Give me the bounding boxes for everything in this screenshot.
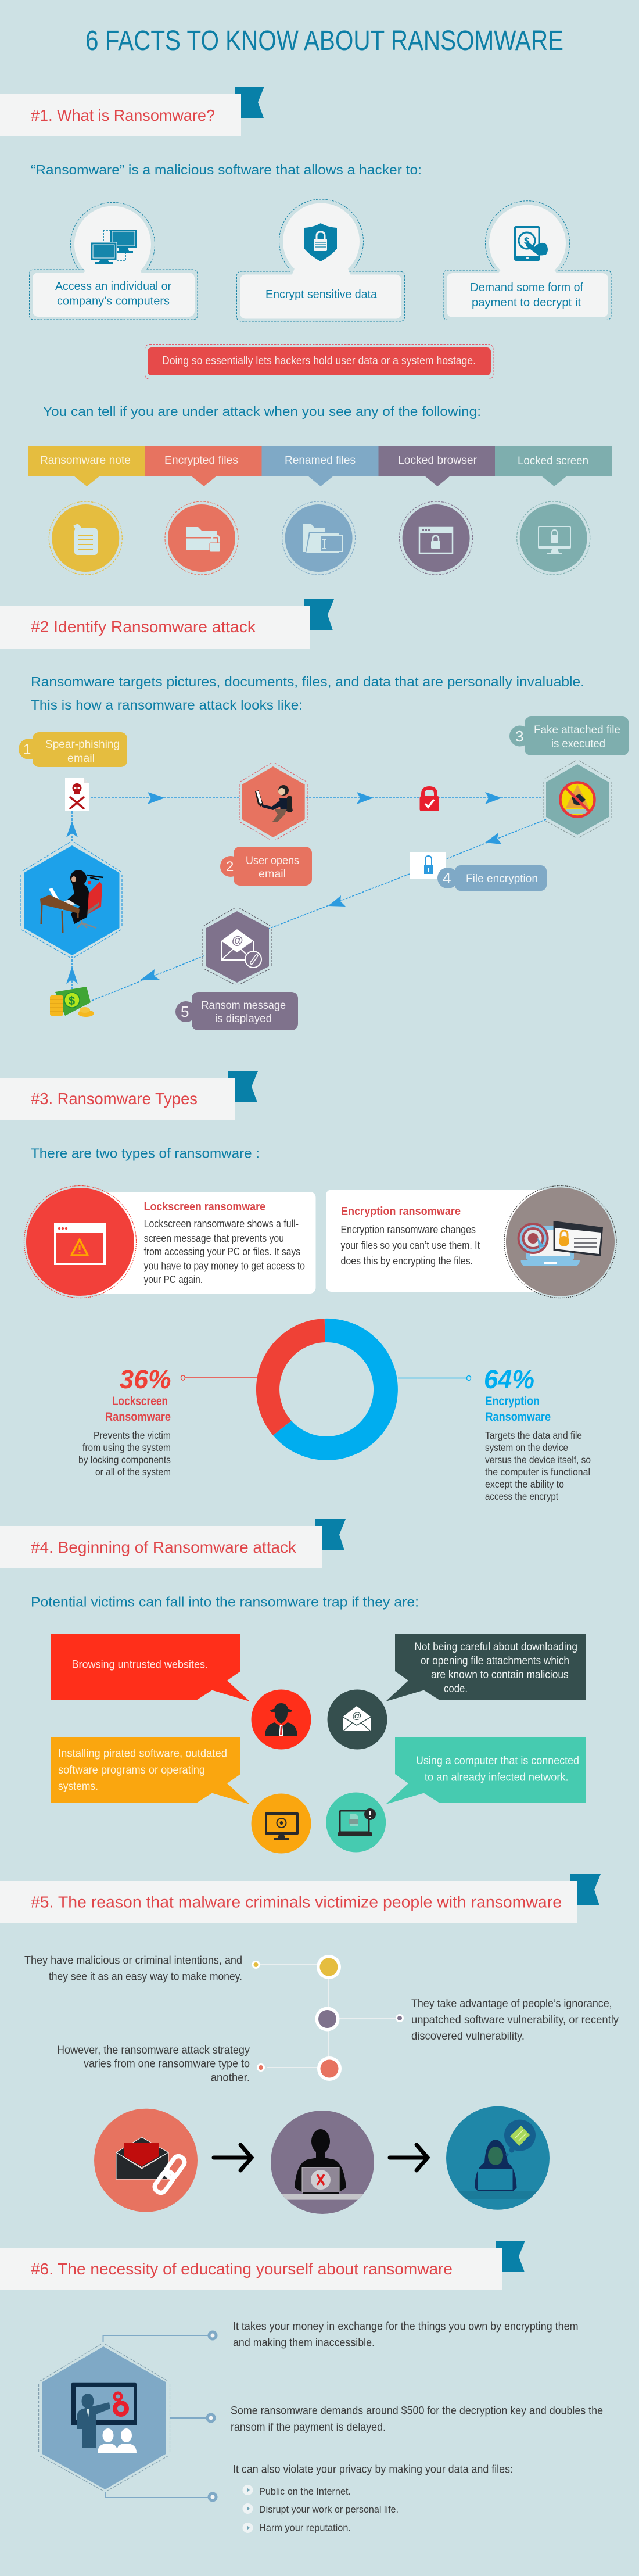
attack flow arrows	[66, 792, 546, 1001]
icon: tablet with dollar and hand	[514, 226, 548, 261]
hexagon: fake file executed	[543, 761, 612, 837]
section 3 heading banner	[0, 1071, 258, 1120]
speech bubble: careless downloads	[386, 1634, 586, 1701]
icon: infected laptop badge	[326, 1792, 386, 1853]
icon: presenter at board	[71, 2383, 137, 2453]
icon: encrypted folder badge	[165, 501, 238, 575]
stat: 64% encryption ransomware: Encryption	[486, 1395, 540, 1408]
arrow	[214, 2145, 252, 2170]
card text	[55, 280, 171, 308]
step 4 label: file encryption: File encryption	[466, 873, 538, 885]
bullet list: privacy harms	[243, 2485, 399, 2534]
intro text: what ransomware targets: Ransomware targets pictures, documents, files, and data that are personally invaluable.	[31, 674, 584, 689]
stat: 64% encryption ransomware: the computer is functional	[485, 1466, 590, 1478]
stat: 64% encryption ransomware: 64%	[484, 1364, 534, 1394]
bullet: harm reputation: Harm your reputation.	[259, 2523, 351, 2534]
step 3 label: fake attached file	[509, 716, 629, 755]
text: malicious intentions	[24, 1955, 242, 1983]
panel body text: your PC again.	[144, 1274, 203, 1285]
intro text: two types: There are two types of ransomware :	[31, 1146, 260, 1161]
icon: money and coins: $	[69, 995, 75, 1008]
hexagon: ransom message	[203, 908, 271, 985]
bullet: disrupt work: Disrupt your work or personal life.	[259, 2504, 399, 2515]
stat: 36% lockscreen ransomware: Prevents the victim	[94, 1429, 171, 1441]
icon: monitor target badge	[251, 1793, 311, 1854]
title: 6 FACTS TO KNOW ABOUT RANSOMWARE	[85, 26, 563, 56]
callout: hostage warning: Doing so essentially lets hackers hold user data or a system hostage.	[162, 354, 476, 367]
speech bubble: untrusted websites	[51, 1634, 250, 1701]
speech bubble: careless downloads: or opening file attachments which	[421, 1655, 569, 1667]
connector dot: top	[208, 2330, 217, 2341]
step 2 label: user opens email	[220, 847, 312, 886]
stat: 36% lockscreen ransomware: Lockscreen	[112, 1395, 168, 1408]
icon: envelope badge	[328, 1690, 387, 1749]
timeline node: purple	[315, 2007, 404, 2032]
text: privacy violation: It can also violate your privacy by making your data and files:	[233, 2464, 513, 2475]
step 3 label: fake attached file: is executed	[551, 738, 605, 750]
tab: encrypted files	[145, 446, 261, 486]
text: malicious intentions: they see it as an easy way to make money.	[49, 1971, 242, 1983]
panel body text: your files so you can’t use them. It	[340, 1239, 480, 1251]
text: takes your money	[233, 2321, 579, 2349]
panel heading: Lockscreen ransomware	[144, 1201, 265, 1213]
text: people's ignorance: They take advantage of people’s ignorance,	[411, 1998, 612, 2010]
icon: prohibited file	[560, 782, 595, 817]
icon: person at computer	[255, 785, 293, 822]
text: $500 demand: Some ransomware demands around $500 for the decryption key and doubles the	[231, 2405, 603, 2417]
hexagon: presenter illustration with connectors	[39, 2335, 208, 2498]
stat: 64% encryption ransomware	[398, 1364, 591, 1502]
tab: renamed files: Renamed files	[285, 454, 356, 467]
icon: renamed folder badge	[282, 501, 356, 575]
text: takes your money: It takes your money in exchange for the things you own by encrypting them	[233, 2321, 579, 2333]
text: people's ignorance: unpatched software vulnerability, or recently	[411, 2014, 619, 2026]
hexagon: user opens email	[239, 763, 307, 840]
card: encrypt data	[237, 199, 405, 321]
icon: tablet with dollar and hand: $	[524, 235, 530, 246]
text: malicious intentions: They have malicious or criminal intentions, and	[24, 1955, 242, 1967]
card text: company’s computers	[57, 295, 170, 308]
icon: victim with locked laptop badge	[271, 2111, 374, 2214]
speech bubble: infected network: to an already infected network.	[425, 1771, 569, 1784]
step 5 label: ransom message displayed	[175, 992, 298, 1030]
step 1 label: spear-phishing email: Spear-phishing	[45, 739, 120, 751]
card text: Encrypt sensitive data	[265, 288, 378, 301]
stat: 36% lockscreen ransomware	[78, 1364, 257, 1478]
hexagon: hacker	[20, 842, 122, 958]
panel body text: does this by encrypting the files.	[340, 1255, 473, 1267]
icon: laptop with target and lock window	[518, 1221, 603, 1266]
section 1 heading banner	[0, 87, 264, 136]
step 2 label: user opens email: User opens	[246, 855, 299, 867]
section 3 heading banner: #3. Ransomware Types	[31, 1090, 198, 1108]
tab: locked browser	[379, 446, 495, 486]
speech bubble: untrusted websites: Browsing untrusted websites.	[72, 1659, 208, 1671]
section 5 heading banner: #5. The reason that malware criminals victimize people with ransomware	[31, 1893, 562, 1911]
step 3 label: fake attached file: 3	[515, 728, 523, 745]
stat: 64% encryption ransomware: except the ability to	[485, 1478, 564, 1490]
stat: 64% encryption ransomware: versus the device itself, so	[485, 1454, 591, 1466]
panel: lockscreen ransomware	[24, 1185, 316, 1298]
stat: 64% encryption ransomware: system on the device	[485, 1442, 568, 1453]
donut chart: 36% lockscreen, 64% encryption	[256, 1319, 398, 1460]
stat: 36% lockscreen ransomware: or all of the system	[95, 1466, 171, 1478]
step 5 label: ransom message displayed: is displayed	[215, 1013, 272, 1025]
tab: locked screen: Locked screen	[518, 455, 588, 467]
text: takes your money: and making them inaccessible.	[233, 2337, 375, 2349]
intro text: what ransomware targets: This is how a ransomware attack looks like:	[31, 697, 303, 712]
card: access computers	[29, 202, 198, 320]
icon: shield with padlock	[304, 223, 337, 261]
section 6 heading banner: #6. The necessity of educating yourself about ransomware	[31, 2260, 453, 2278]
card text: Access an individual or	[55, 280, 171, 293]
intro text: what ransomware allows: “Ransomware” is a malicious software that allows a hacker to:	[31, 162, 422, 177]
icon: spy badge	[251, 1690, 311, 1749]
connector dot: middle	[206, 2413, 216, 2423]
text: strategy varies: another.	[211, 2072, 250, 2084]
icon: hacker thinking of money badge	[446, 2106, 550, 2210]
tab: ransomware note	[28, 446, 145, 486]
intro text: potential victims: Potential victims can fall into the ransomware trap if they are:	[31, 1595, 419, 1610]
speech bubble: infected network: Using a computer that is connected	[416, 1755, 579, 1767]
icon: browser warning	[55, 1224, 105, 1264]
card: demand payment	[443, 201, 611, 320]
panel body text	[340, 1224, 480, 1267]
stat: 64% encryption ransomware: Targets the data and file	[485, 1429, 582, 1441]
tab: locked browser: Locked browser	[398, 454, 478, 467]
bullet: public on the internet: Public on the Internet.	[259, 2486, 351, 2497]
step 4 label: file encryption	[437, 865, 547, 891]
step 5 label: ransom message displayed: Ransom message	[201, 999, 286, 1012]
speech bubble: pirated software: systems.	[58, 1780, 98, 1793]
step 1 label: spear-phishing email	[19, 732, 127, 767]
section 2 heading banner	[0, 599, 334, 649]
section 6 heading banner	[0, 2241, 525, 2290]
step 1 label: spear-phishing email: 1	[23, 741, 31, 757]
section 4 heading banner: #4. Beginning of Ransomware attack	[31, 1538, 297, 1556]
section 2 heading banner: #2 Identify Ransomware attack	[31, 618, 256, 636]
icon: malicious email link badge	[94, 2109, 198, 2212]
panel body text	[144, 1218, 305, 1285]
panel: encryption ransomware	[326, 1185, 616, 1298]
icon: malicious document with skull	[65, 778, 89, 811]
timeline node: yellow	[252, 1955, 341, 1979]
icon: money and coins	[50, 987, 94, 1017]
timeline node: red	[257, 2056, 342, 2081]
stat: 36% lockscreen ransomware: from using the system	[82, 1442, 171, 1453]
icon: two computers	[91, 230, 137, 264]
icon: envelope with attachment: @	[232, 934, 243, 947]
panel body text: from accessing your PC or files. It says	[144, 1246, 300, 1257]
speech bubble: careless downloads: are known to contain malicious	[431, 1669, 569, 1681]
tab: renamed files	[261, 446, 379, 486]
step 5 label: ransom message displayed: 5	[181, 1003, 189, 1020]
panel heading: Encryption ransomware	[341, 1205, 461, 1218]
step 2 label: user opens email: 2	[226, 859, 234, 875]
icon: locked browser badge	[400, 501, 473, 575]
card text: Demand some form of	[471, 281, 583, 294]
panel body text: screen message that prevents you	[144, 1233, 284, 1244]
timeline of motives	[252, 1955, 404, 2081]
white box: file encryption lock icon	[410, 852, 446, 879]
stat: 64% encryption ransomware: access the encrypt	[485, 1491, 558, 1502]
step 2 label: user opens email: email	[259, 868, 286, 880]
text: strategy varies: However, the ransomware attack strategy	[57, 2044, 250, 2056]
section 1 heading banner: #1. What is Ransomware?	[31, 106, 215, 124]
subheading: signs of attack: You can tell if you are under attack when you see any of the following:	[43, 404, 481, 419]
card text: payment to decrypt it	[472, 296, 581, 309]
text: strategy varies: varies from one ransomware type to	[84, 2058, 250, 2070]
icon: locked screen badge	[517, 501, 590, 575]
tab: ransomware note: Ransomware note	[40, 454, 131, 467]
icon: hooded hacker at desk	[40, 870, 103, 933]
speech bubble: infected network	[386, 1737, 586, 1804]
text: strategy varies	[57, 2044, 250, 2084]
stat: 36% lockscreen ransomware: by locking components	[78, 1454, 171, 1466]
speech bubble: pirated software: software programs or operating	[58, 1764, 205, 1776]
speech bubble: careless downloads: code.	[444, 1683, 468, 1695]
tab: encrypted files: Encrypted files	[164, 454, 238, 467]
text: $500 demand: ransom if the payment is delayed.	[231, 2421, 386, 2434]
card text	[471, 281, 583, 309]
panel body text: you have to pay money to get access to	[144, 1260, 305, 1271]
panel body text: Encryption ransomware changes	[340, 1224, 476, 1235]
text: people's ignorance	[411, 1998, 619, 2043]
icon: red padlock with check	[419, 788, 439, 811]
tab: locked screen	[495, 446, 612, 486]
text: people's ignorance: discovered vulnerability.	[411, 2030, 525, 2043]
intro text: what ransomware targets	[31, 674, 584, 712]
step 3 label: fake attached file: Fake attached file	[534, 724, 620, 736]
connector dot: bottom	[208, 2492, 217, 2502]
arrow	[390, 2145, 428, 2170]
section 5 heading banner	[0, 1874, 601, 1923]
text: $500 demand	[231, 2405, 603, 2434]
step 4 label: file encryption: 4	[443, 869, 451, 887]
icon: envelope badge: @	[352, 1711, 361, 1721]
speech bubble: pirated software	[51, 1737, 250, 1804]
speech bubble: pirated software: Installing pirated software, outdated	[58, 1748, 227, 1760]
icon: ransomware note badge	[49, 501, 122, 575]
stat: 64% encryption ransomware: Ransomware	[486, 1410, 551, 1424]
stat: 36% lockscreen ransomware: 36%	[120, 1364, 171, 1394]
stat: 36% lockscreen ransomware: Ransomware	[105, 1410, 171, 1424]
section 4 heading banner	[0, 1519, 346, 1568]
callout: hostage warning	[145, 344, 493, 379]
speech bubble: careless downloads: Not being careful about downloading	[414, 1641, 577, 1653]
step 1 label: spear-phishing email: email	[67, 753, 95, 765]
panel body text: Lockscreen ransomware shows a full-	[144, 1218, 299, 1230]
